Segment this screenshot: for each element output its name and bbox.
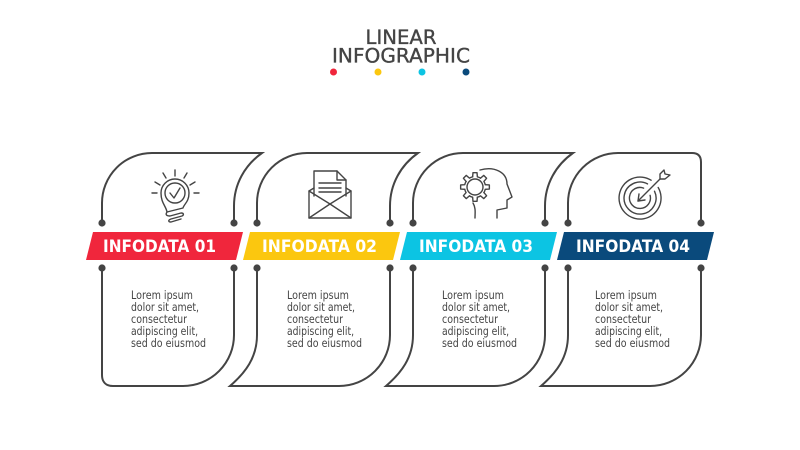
text block 4: sed do eiusmod [595,336,670,350]
banner 1 [86,232,243,260]
icon: light bulb with check [152,170,199,222]
text block 4: Lorem ipsum [595,288,657,302]
text block 2 [287,288,362,350]
text block 2: dolor sit amet, [287,300,355,314]
card 3 bottom outline [386,264,549,386]
text block 3: adipiscing elit, [442,324,509,338]
banner 2: INFODATA 02 [262,237,377,256]
title: LINEAR [366,26,436,49]
text block 2: consectetur [287,312,343,326]
banner 3 [400,232,557,260]
title: INFOGRAPHIC [332,44,470,68]
text block 4 [595,288,670,350]
banner 4: INFODATA 04 [576,237,690,256]
text block 1: dolor sit amet, [131,300,199,314]
text block 1: consectetur [131,312,187,326]
text block 2: adipiscing elit, [287,324,354,338]
text block 3: consectetur [442,312,498,326]
text block 1 [131,288,206,350]
panel: infodata 04 [541,153,714,386]
panel: infodata 03 [386,153,573,386]
text block 4: adipiscing elit, [595,324,662,338]
icon: envelope with letter [309,171,351,218]
banner 4 [557,232,714,260]
icon: target with arrow [619,170,670,219]
text block 3: dolor sit amet, [442,300,510,314]
panel: infodata 01 [86,153,262,386]
banner 3: INFODATA 03 [419,237,533,256]
icon: head with gear [461,169,512,218]
banner 2 [243,232,400,260]
title colour dots [330,68,470,76]
card 4 bottom outline [541,264,705,386]
card 2 top outline [253,153,418,227]
banner 1: INFODATA 01 [103,237,216,256]
panel: infodata 02 [230,153,418,386]
card 3 top outline [409,153,573,227]
text block 3 [442,288,517,350]
title [332,26,470,68]
card 1 top outline [98,153,262,227]
text block 2: Lorem ipsum [287,288,349,302]
text block 3: Lorem ipsum [442,288,504,302]
text block 4: dolor sit amet, [595,300,663,314]
text block 4: consectetur [595,312,651,326]
text block 3: sed do eiusmod [442,336,517,350]
card 2 bottom outline [230,264,394,386]
card 4 top outline [564,153,705,227]
text block 2: sed do eiusmod [287,336,362,350]
card 1 bottom outline [98,264,238,386]
text block 1: Lorem ipsum [131,288,193,302]
text block 1: sed do eiusmod [131,336,206,350]
text block 1: adipiscing elit, [131,324,198,338]
